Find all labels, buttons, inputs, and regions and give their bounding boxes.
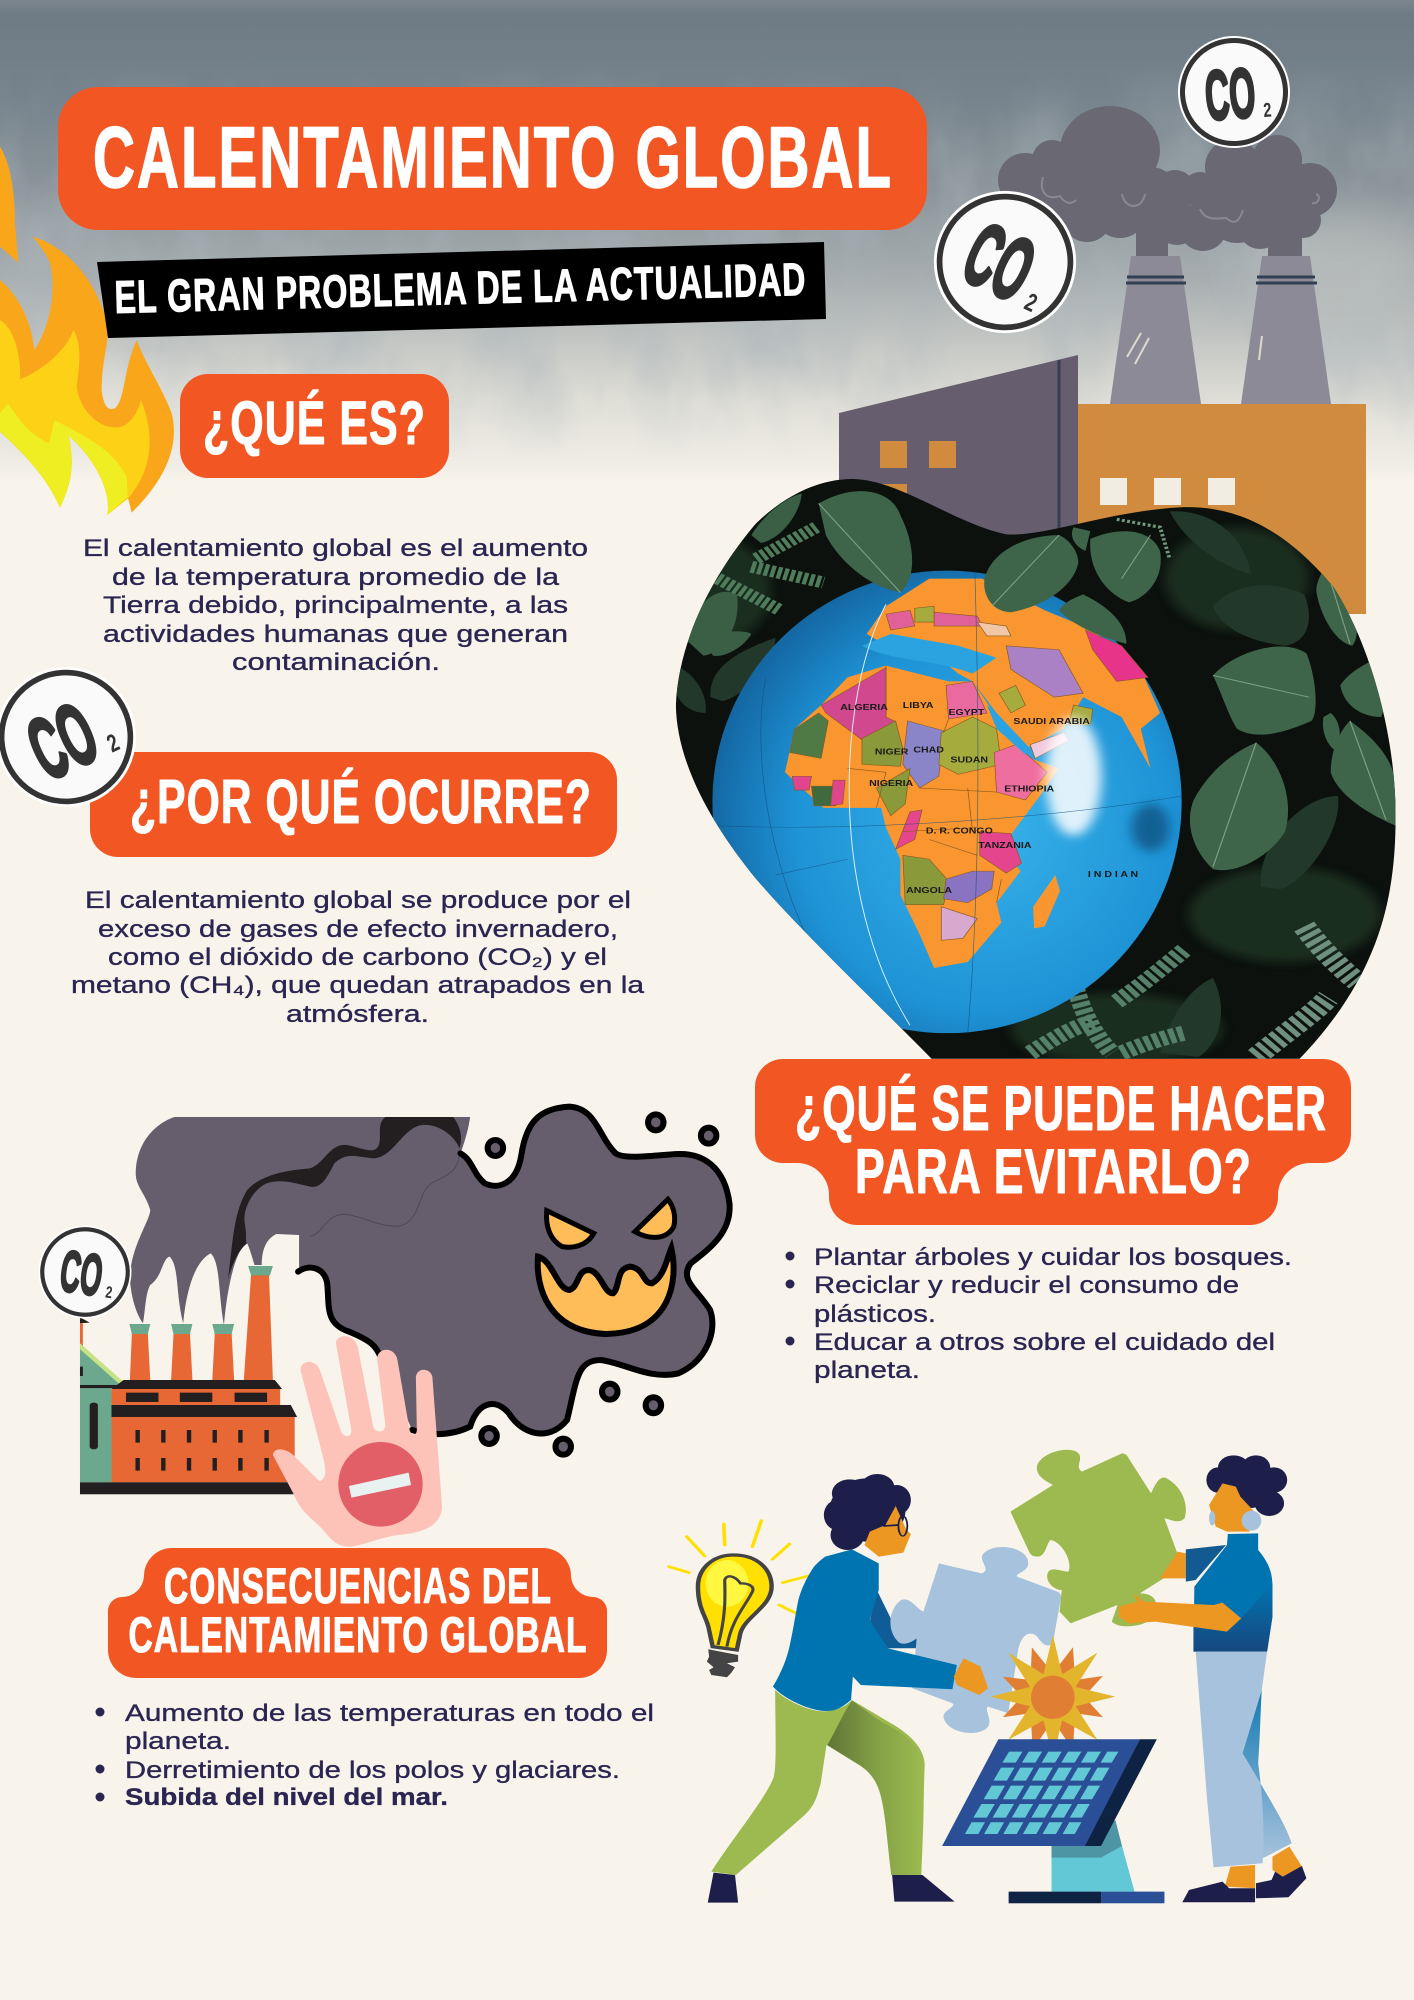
smoke crease line [310, 1153, 459, 1236]
list: consequences [96, 1700, 654, 1811]
illustration: people with puzzle, solar panel and bulb [669, 1450, 1306, 1903]
map labels: EGYPT [948, 708, 984, 718]
foreground leaves [819, 491, 1396, 870]
heading: que se puede hacer: PARA EVITARLO? [855, 1137, 1252, 1207]
land: Madagascar [1033, 875, 1060, 928]
blue puzzle piece [890, 1547, 1061, 1733]
purple building [839, 355, 1078, 560]
badge: CO2 large: 2 [1020, 288, 1041, 318]
smoke particles [481, 1114, 716, 1455]
text block: definition: Tierra debido, principalmente, a las [103, 592, 568, 619]
orange building [1078, 404, 1366, 614]
sun [990, 1635, 1115, 1758]
right person [1119, 1455, 1306, 1902]
sea patches and lighting [862, 634, 997, 673]
map labels: NIGER [875, 747, 908, 757]
title banner [58, 87, 927, 230]
map labels [840, 701, 1138, 896]
heading: que se puede hacer [755, 1059, 1351, 1225]
badge: CO2 left: 2 [103, 729, 124, 758]
countries [790, 606, 1148, 940]
map labels: I N D I A N [1088, 870, 1138, 880]
land: Europe and Asia [867, 579, 1160, 768]
map labels: D. R. CONGO [926, 826, 993, 836]
map labels: ANGOLA [906, 886, 952, 896]
list: consequences: Derretimiento de los polos y glaciares. [125, 1757, 620, 1784]
solar panel [942, 1739, 1164, 1903]
land: Africa [785, 666, 1059, 968]
badge: CO2 over factory: CO [56, 1239, 106, 1309]
heading: que es [180, 374, 449, 478]
map labels: SUDAN [950, 755, 988, 765]
list: solutions: plásticos. [814, 1301, 936, 1328]
heading: consecuencias [108, 1548, 607, 1678]
text block: causes: como el dióxido de carbono (CO₂) y el [108, 944, 607, 971]
list: solutions: Educar a otros sobre el cuidado del [814, 1329, 1275, 1356]
map labels: ETHIOPIA [1004, 784, 1054, 794]
text block: definition [83, 535, 588, 676]
badge: CO2 left [0, 644, 159, 830]
heading: por que ocurre: ¿POR QUÉ OCURRE? [130, 768, 592, 837]
chimneys [1110, 256, 1331, 404]
list: consequences: Aumento de las temperaturas en todo el [125, 1700, 654, 1727]
soft foliage glow [665, 527, 1381, 1065]
subtitle ribbon [97, 242, 826, 338]
meridians [715, 575, 1182, 1033]
badge: CO2 left: CO [13, 684, 112, 799]
windows [880, 441, 956, 511]
map labels: TANZANIA [978, 841, 1032, 851]
text block: causes: atmósfera. [286, 1001, 429, 1028]
icon: factory with chimneys and smoke (top right) [839, 106, 1366, 614]
heading: por que ocurre [90, 752, 617, 857]
badge: CO2 over factory [33, 1220, 137, 1324]
monster outline [298, 1107, 730, 1434]
list: solutions [786, 1244, 1292, 1384]
smoke monster body [130, 1107, 730, 1433]
leaves behind globe [674, 511, 1338, 1057]
icon: flames on left edge [0, 147, 174, 515]
list: solutions: Plantar árboles y cuidar los bosques. [814, 1244, 1292, 1271]
text block: causes: metano (CH₄), que quedan atrapados en la [71, 972, 644, 999]
left person arm [773, 1549, 988, 1711]
badge: CO2 large: CO [950, 204, 1049, 320]
text block: definition: contaminación. [232, 649, 440, 676]
text block: causes: El calentamiento global se produce por el [85, 887, 631, 914]
illustration: factory and smoke monster [80, 1107, 730, 1547]
map labels: LIBYA [903, 701, 934, 711]
title text: CALENTAMIENTO GLOBAL [93, 110, 893, 206]
list: solutions: Reciclar y reducir el consumo de [814, 1272, 1239, 1299]
text block: causes [71, 887, 644, 1028]
text block: definition: de la temperatura promedio de la [112, 564, 559, 591]
badge: CO2 top: 2 [1263, 99, 1272, 122]
light bulb [669, 1521, 810, 1677]
background: smoky sky [0, 0, 1414, 482]
list: consequences: planeta. [125, 1728, 231, 1755]
heading: consecuencias: CONSECUENCIAS DEL [164, 1558, 552, 1614]
smoke clouds [998, 106, 1337, 260]
text block: definition: El calentamiento global es el aumento [83, 535, 588, 562]
monster eyes [546, 1199, 675, 1247]
heading: que es: ¿QUÉ ES? [203, 389, 426, 457]
heading: consecuencias: CALENTAMIENTO GLOBAL [128, 1607, 588, 1663]
map labels: ALGERIA [840, 703, 888, 713]
map labels: SAUDI ARABIA [1013, 717, 1090, 727]
text block: causes: exceso de gases de efecto invernadero, [98, 916, 618, 943]
globe [712, 571, 1182, 1033]
factory building [80, 1266, 297, 1494]
green puzzle piece [1010, 1450, 1186, 1626]
photo: globe among leaves in organic blob [660, 460, 1410, 1077]
map labels: NIGERIA [869, 779, 913, 789]
list: solutions: planeta. [814, 1357, 920, 1384]
hand with stop sign [273, 1336, 442, 1547]
badge: CO2 large [910, 167, 1100, 357]
left person [708, 1474, 955, 1903]
subtitle text: EL GRAN PROBLEMA DE LA ACTUALIDAD [114, 253, 807, 323]
ferns [718, 527, 823, 610]
badge: CO2 top [1174, 32, 1294, 152]
blob background [660, 460, 1410, 1077]
badge: CO2 top: CO [1202, 54, 1258, 135]
monster mouth [538, 1248, 674, 1334]
text block: definition: actividades humanas que generan [103, 621, 568, 648]
list: consequences: Subida del nivel del mar. [125, 1784, 448, 1811]
badge: CO2 over factory: 2 [104, 1283, 114, 1302]
map labels: CHAD [913, 745, 944, 755]
dark smoke band [228, 1117, 461, 1280]
